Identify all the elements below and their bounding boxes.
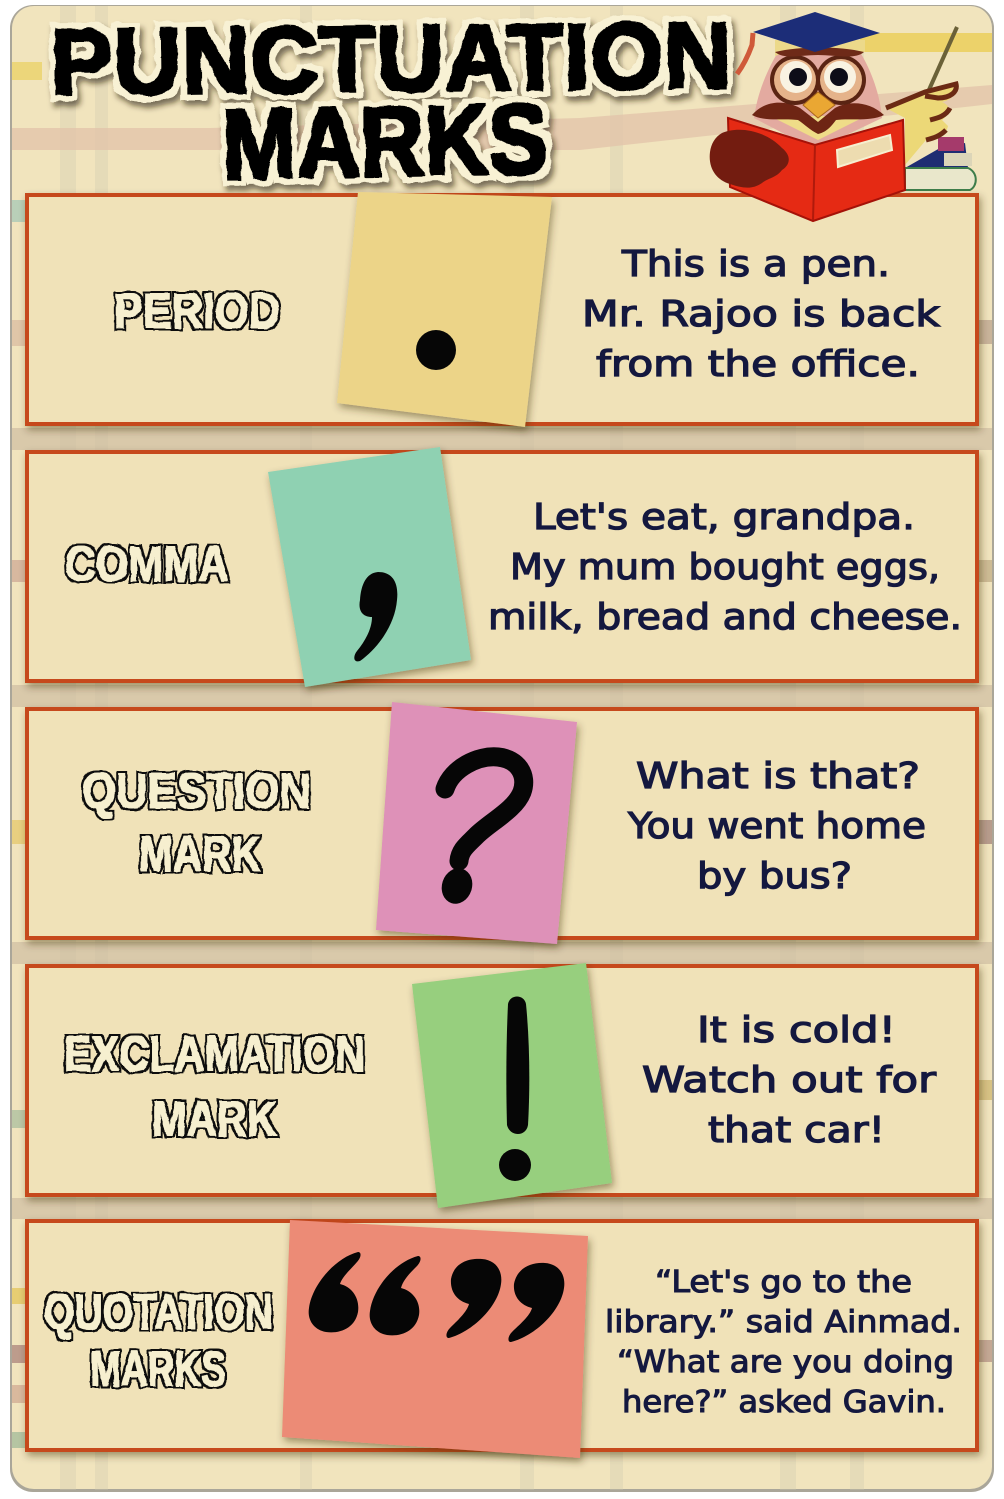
panel: question mark <box>27 702 977 944</box>
sticky note: comma <box>268 447 471 687</box>
title <box>49 2 733 201</box>
label: comma: COMMA <box>65 536 229 592</box>
open red book <box>728 118 905 221</box>
chest feathers <box>752 103 884 134</box>
example sentences: question mark: You went home <box>627 806 926 847</box>
example sentences: exclamation mark: It is cold! <box>697 1010 896 1051</box>
sticky note: question mark <box>376 702 577 944</box>
label: quotation marks <box>44 1284 273 1397</box>
illustration: owl reading a book <box>710 12 976 221</box>
label: period: PERIOD <box>114 283 280 339</box>
example sentences: period <box>582 244 940 385</box>
example sentences: quotation marks: here?” asked Gavin. <box>622 1385 946 1420</box>
example sentences: comma <box>488 497 962 638</box>
label: quotation marks: MARKS <box>90 1341 226 1397</box>
panel: quotation marks <box>27 1220 977 1458</box>
sticky note: period <box>337 192 552 427</box>
example sentences: period: This is a pen. <box>621 244 890 285</box>
example sentences: exclamation mark: that car! <box>708 1110 885 1151</box>
stack of books <box>905 137 976 190</box>
glasses and eyes <box>770 55 866 105</box>
label: quotation marks: QUOTATION <box>44 1284 273 1340</box>
label: exclamation mark: EXCLAMATION <box>64 1026 365 1082</box>
example sentences: quotation marks <box>605 1265 962 1420</box>
example sentences: question mark <box>627 756 926 897</box>
example sentences: question mark: What is that? <box>636 756 920 797</box>
panel: period <box>27 192 977 427</box>
example sentences: quotation marks: library.” said Ainmad. <box>605 1305 962 1340</box>
panel: exclamation mark <box>27 963 977 1208</box>
example sentences: question mark: by bus? <box>697 856 852 897</box>
belly <box>770 116 866 140</box>
label: question mark: MARK <box>139 826 261 882</box>
sticky note: quotation marks <box>282 1220 588 1458</box>
sticky note: exclamation mark <box>412 963 612 1208</box>
example sentences: period: Mr. Rajoo is back <box>582 294 940 335</box>
left wing <box>710 130 789 188</box>
title: PUNCTUATION <box>49 2 733 115</box>
example sentences: comma: My mum bought eggs, <box>510 547 940 588</box>
example sentences: quotation marks: “What are you doing <box>617 1345 954 1380</box>
label: exclamation mark: MARK <box>152 1091 277 1147</box>
label: exclamation mark <box>64 1026 365 1147</box>
graduation cap <box>737 12 880 74</box>
example sentences: comma: milk, bread and cheese. <box>488 597 962 638</box>
panel: comma <box>27 447 977 687</box>
pointer stick <box>924 27 957 101</box>
beak <box>803 92 835 118</box>
example sentences: quotation marks: “Let's go to the <box>655 1265 912 1300</box>
example sentences: exclamation mark <box>642 1010 936 1151</box>
title: MARKS <box>221 83 549 201</box>
owl head and body <box>754 48 882 150</box>
label: question mark: QUESTION <box>82 763 311 819</box>
label: question mark <box>82 763 311 882</box>
example sentences: comma: Let's eat, grandpa. <box>533 497 915 538</box>
example sentences: period: from the office. <box>596 344 920 385</box>
right wing <box>886 84 956 165</box>
example sentences: exclamation mark: Watch out for <box>642 1060 936 1101</box>
